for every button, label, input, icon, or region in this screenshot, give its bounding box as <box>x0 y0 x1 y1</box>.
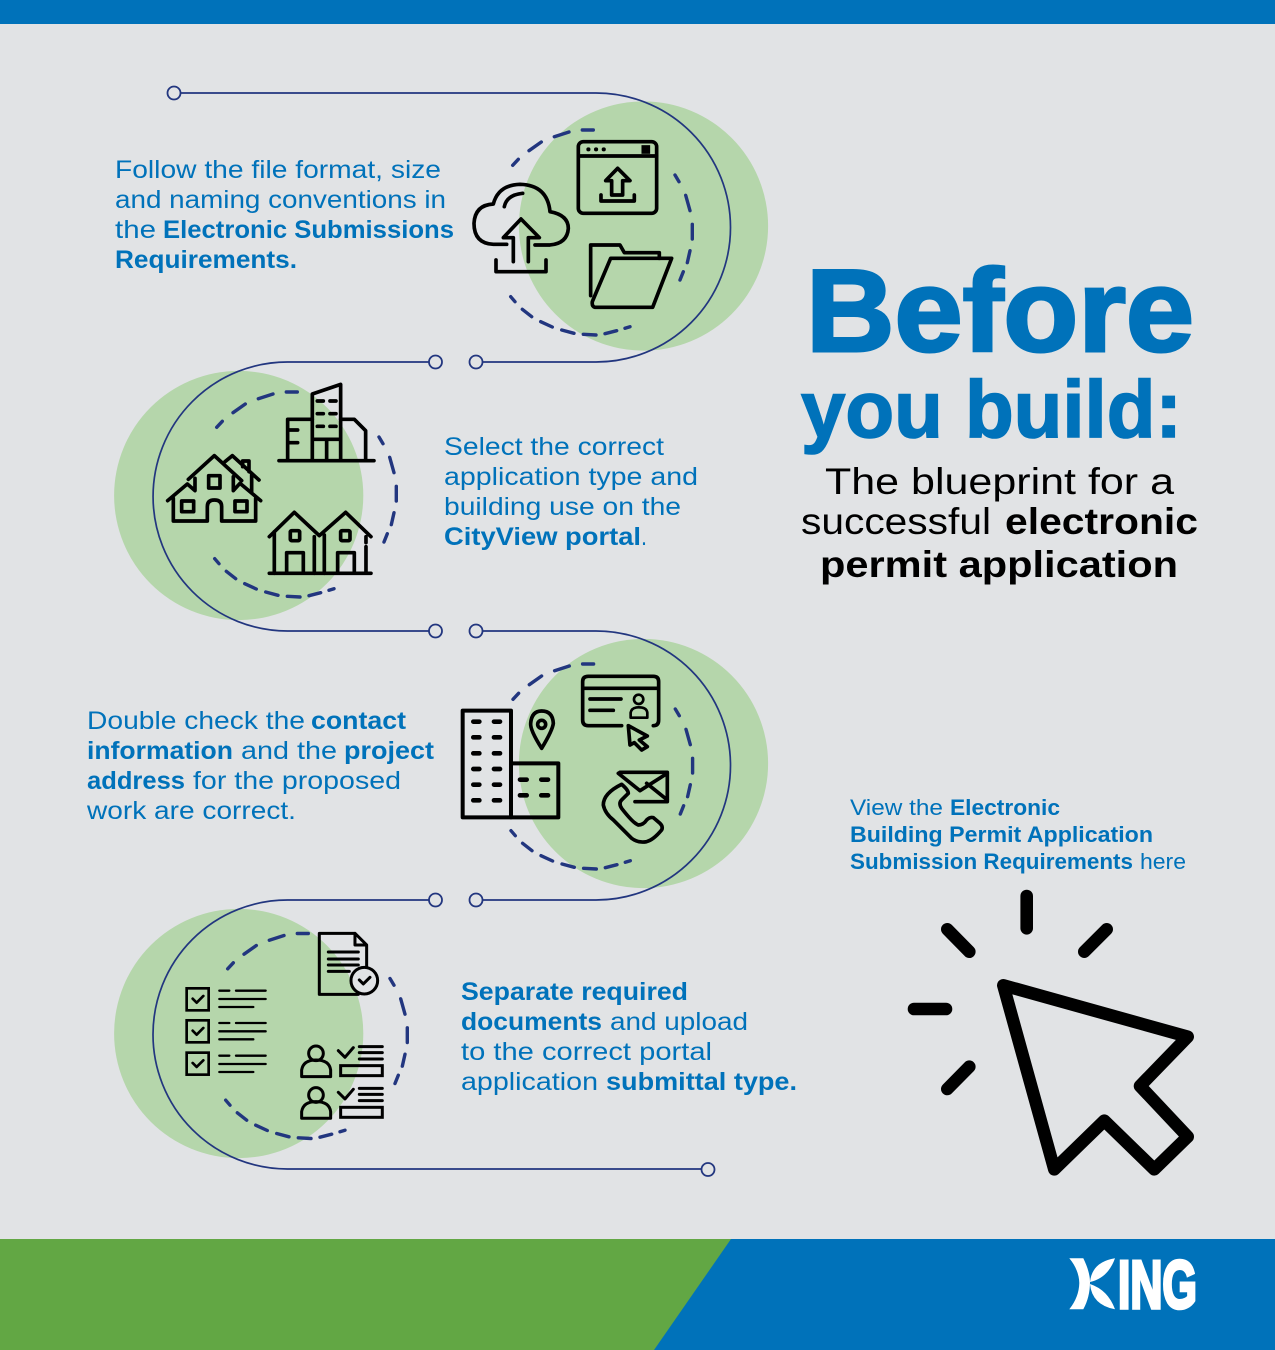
icon: phone and envelope <box>603 772 667 842</box>
green circle 4 <box>114 909 363 1158</box>
icon: large house <box>168 456 261 521</box>
text: step 3: and the <box>241 737 337 765</box>
icon: approved document <box>319 933 378 994</box>
text: step 3: information <box>87 737 233 765</box>
footer green <box>0 1239 740 1350</box>
text: step 1 <box>115 156 454 274</box>
dashed ring 2 <box>215 392 396 597</box>
subtitle <box>801 460 1198 585</box>
node lower <box>470 894 482 906</box>
callout: view requirements: View the <box>850 795 943 820</box>
subtitle: The blueprint for a <box>825 460 1174 502</box>
text: step 3: for the proposed <box>193 767 401 795</box>
callout: view requirements: here <box>1140 849 1186 874</box>
node right of step 1 <box>470 356 482 368</box>
dashed ring 1 <box>511 130 692 335</box>
text: step 4 <box>461 978 797 1096</box>
panel: step 3 contact information <box>86 624 768 906</box>
panel: step 1 file format <box>115 86 768 368</box>
end node <box>702 1163 714 1176</box>
text: step 4: Separate required <box>461 978 688 1006</box>
green circle 3 <box>519 639 768 888</box>
panel: step 4 separate documents <box>114 894 797 1176</box>
dashed ring 3 <box>511 664 693 869</box>
callout: view requirements: Electronic <box>950 795 1060 820</box>
heading: Before: Before <box>806 245 1194 376</box>
text: step 3 <box>86 707 435 825</box>
text: step 3: contact <box>311 707 407 735</box>
text: step 1: Follow the file format, size <box>115 156 441 184</box>
connector line 2 <box>153 362 429 631</box>
text: step 2: Select the correct <box>444 433 664 461</box>
text: step 3: project <box>344 737 435 765</box>
start node <box>168 86 180 100</box>
text: step 3: address <box>87 767 185 795</box>
panel: step 2 application type <box>114 356 698 638</box>
callout: view requirements: Submission Requirements <box>850 849 1133 874</box>
icon: contact card with cursor <box>583 676 659 750</box>
icon: cloud upload <box>474 184 568 272</box>
icon: checklist <box>187 988 266 1075</box>
text: step 2: . <box>641 523 647 551</box>
text: step 4: submittal type. <box>606 1068 797 1096</box>
text: step 4: documents <box>461 1008 602 1036</box>
text: step 1: Electronic Submissions <box>163 216 454 244</box>
green circle 1 <box>519 101 768 351</box>
logo: King: ING <box>1118 1247 1197 1323</box>
subtitle: permit application <box>820 543 1178 585</box>
text: step 4: and upload <box>610 1008 748 1036</box>
text: step 2 <box>444 433 698 551</box>
footer blue <box>654 1239 1275 1350</box>
icon: people with checklists <box>302 1046 382 1118</box>
connector line 3 <box>482 631 730 900</box>
icon: twin houses <box>269 512 371 573</box>
callout: view requirements <box>850 795 1186 874</box>
subtitle: electronic <box>1005 500 1198 542</box>
logo: King <box>1069 1247 1197 1323</box>
icon: office building <box>279 384 374 461</box>
node upper <box>429 894 442 906</box>
connector line 1 <box>180 93 730 362</box>
node upper <box>429 356 442 368</box>
icon: click cursor <box>914 896 1188 1169</box>
callout: view requirements: Building Permit Application <box>850 822 1153 847</box>
text: step 1: Requirements. <box>115 246 297 274</box>
icon: browser upload window <box>578 142 657 213</box>
text: step 2: CityView portal <box>444 523 641 551</box>
text: step 2: application type and <box>444 463 698 491</box>
footer band <box>0 1239 1275 1350</box>
text: step 4: application <box>461 1068 598 1096</box>
text: step 1: and naming conventions in <box>115 186 446 214</box>
text: step 2: building use on the <box>444 493 681 521</box>
node lower <box>429 624 442 638</box>
text: step 3: Double check the <box>87 707 305 735</box>
connector line 4 <box>153 900 701 1169</box>
subtitle: successful <box>801 500 991 542</box>
top bar <box>0 0 1275 24</box>
node upper <box>470 624 482 638</box>
text: step 3: work are correct. <box>86 797 296 825</box>
icon: folder <box>591 245 672 307</box>
text: step 4: to the correct portal <box>461 1038 712 1066</box>
text: step 1: the <box>115 216 156 244</box>
title <box>801 245 1198 585</box>
dashed ring 4 <box>226 934 407 1138</box>
heading: you build: you build: <box>801 365 1182 455</box>
icon: buildings with pin <box>463 711 558 817</box>
green circle 2 <box>114 371 363 620</box>
